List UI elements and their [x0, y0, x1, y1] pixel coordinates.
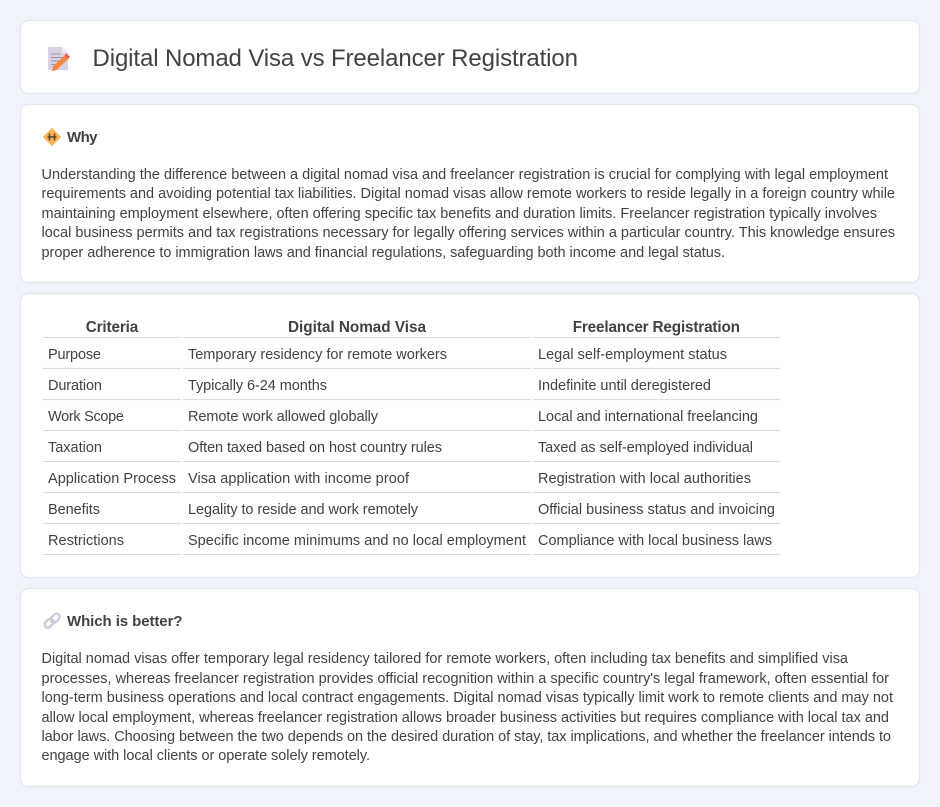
row: restrictions — [48, 533, 772, 549]
text block: which is better paragraph — [42, 651, 893, 764]
panel: which is better — [20, 588, 920, 786]
text block: which is better paragraph: long-term business operations and local contract engagements. Digital nomad visas typically limit work to remote clients and may not — [42, 690, 893, 706]
row: duration: Indefinite until deregistered — [538, 378, 711, 394]
text block: which is better paragraph: processes, whereas freelancer registration provides official recognition within a specific country's legal framework, often essential for — [42, 671, 889, 687]
heading: which is better: Which is better? — [67, 613, 182, 630]
row: application process: Registration with local authorities — [538, 471, 751, 487]
icon: diamond sign — [44, 128, 60, 146]
row: purpose: Purpose — [48, 347, 101, 363]
table header: Freelancer Registration — [573, 319, 740, 336]
row: taxation — [48, 440, 753, 456]
row: taxation: Often taxed based on host country rules — [188, 440, 442, 456]
text block: why paragraph: local business permits and tax registrations necessary for legally offering services within a particular country. This knowledge ensures — [42, 225, 895, 241]
table header: Criteria — [86, 319, 139, 336]
row: work scope — [48, 409, 758, 425]
icon: document with pencil — [48, 47, 70, 71]
row: benefits — [48, 502, 775, 518]
text block: why paragraph: maintaining employment elsewhere, often offering specific tax benefits and duration limits. Freelancer registration typically involves — [42, 206, 877, 222]
row: purpose: Legal self-employment status — [538, 347, 727, 363]
text block: which is better paragraph: Digital nomad visas offer temporary legal residency tailored for remote workers, often including tax benefits and simplified visa — [42, 651, 849, 667]
row: benefits: Benefits — [48, 502, 100, 518]
row: duration: Duration — [48, 378, 102, 394]
text block: which is better paragraph: engage with local clients or operate solely remotely. — [42, 748, 370, 764]
row: restrictions: Compliance with local business laws — [538, 533, 772, 549]
row: taxation: Taxation — [48, 440, 102, 456]
row: benefits: Official business status and invoicing — [538, 502, 775, 518]
icon: chain link — [43, 612, 61, 629]
row: purpose — [48, 347, 727, 363]
row: duration — [48, 378, 711, 394]
table header: Digital Nomad Visa — [288, 319, 426, 336]
title: Digital Nomad Visa vs Freelancer Registration — [92, 45, 578, 72]
text block: why paragraph: requirements and avoiding potential tax liabilities. Digital nomad visas allow remote workers to reside legally in a foreign country while — [42, 186, 895, 202]
row: application process: Application Process — [48, 471, 176, 487]
row: restrictions: Specific income minimums and no local employment — [188, 533, 526, 549]
row: application process: Visa application with income proof — [188, 471, 410, 487]
panel: title card — [20, 20, 920, 94]
panel: comparison table — [20, 294, 920, 578]
row: work scope: Remote work allowed globally — [188, 409, 379, 425]
row: duration: Typically 6-24 months — [188, 378, 327, 394]
row: application process — [48, 471, 751, 487]
text block: why paragraph — [42, 167, 895, 261]
text block: which is better paragraph: labor laws. Choosing between the two depends on the desired duration of stay, tax implications, and whether the freelancer intends to — [42, 729, 891, 745]
text block: why paragraph: proper adherence to immigration laws and financial regulations, safeguarding both income and legal status. — [42, 245, 725, 261]
panel: why — [20, 104, 920, 282]
text block: why paragraph: Understanding the difference between a digital nomad visa and freelancer registration is crucial for complying with legal employment — [42, 167, 888, 183]
table header — [86, 319, 740, 336]
row: work scope: Work Scope — [48, 409, 124, 425]
row: restrictions: Restrictions — [48, 533, 124, 549]
row: taxation: Taxed as self-employed individual — [538, 440, 753, 456]
row: work scope: Local and international freelancing — [538, 409, 758, 425]
row: purpose: Temporary residency for remote workers — [188, 347, 447, 363]
text block: which is better paragraph: allow local employment, whereas freelancer registration allows broader business activities but requires compliance with local tax and — [42, 710, 889, 726]
heading: why: Why — [67, 129, 98, 146]
row: benefits: Legality to reside and work remotely — [188, 502, 419, 518]
